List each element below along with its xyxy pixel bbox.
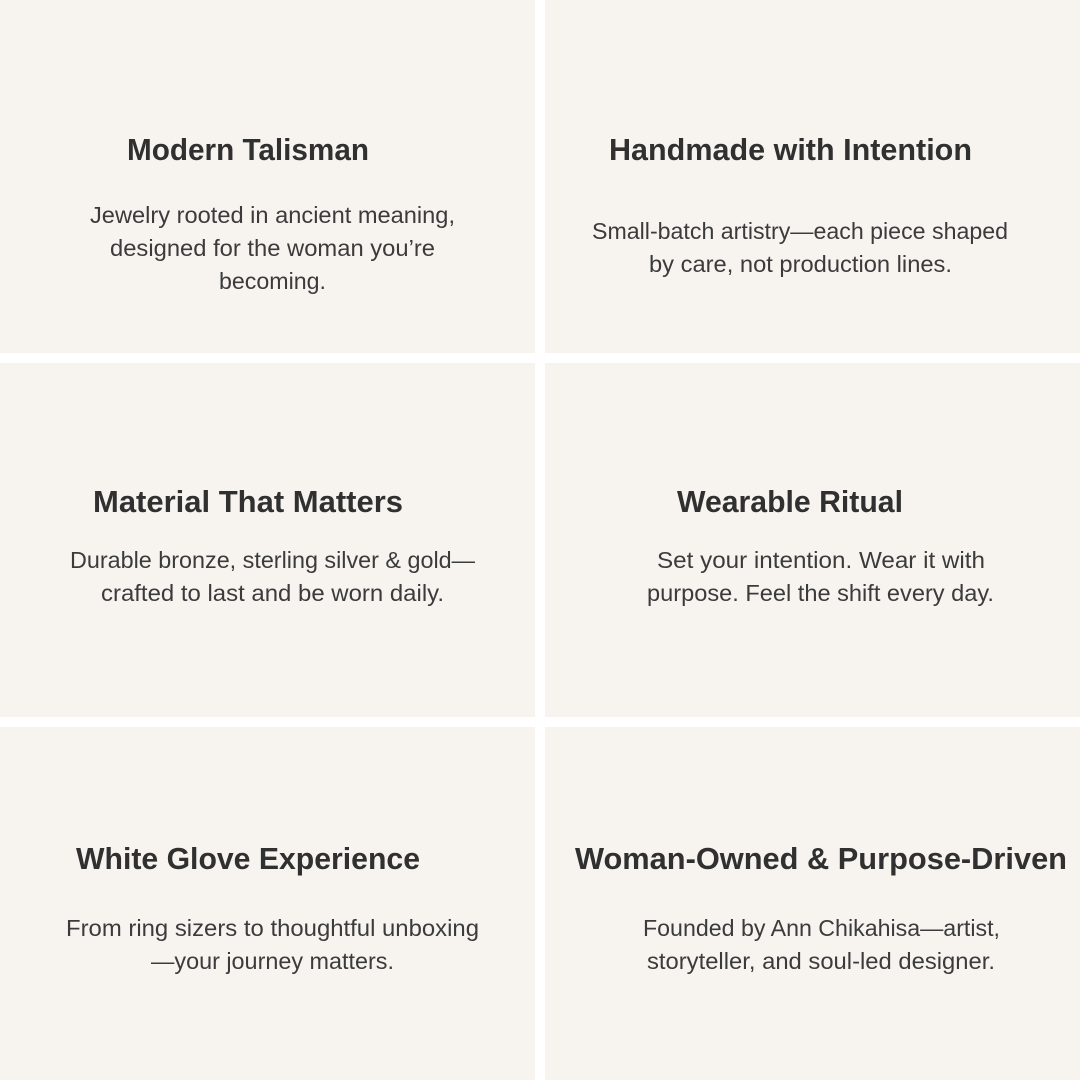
panel: Wearable Ritual (545, 363, 1080, 717)
text block: Handmade with Intention description: by care, not production lines. (649, 251, 952, 277)
text block: Modern Talisman description: becoming. (219, 268, 326, 294)
text block: Wearable Ritual description: Set your intention. Wear it with (657, 547, 985, 573)
text block: Modern Talisman description: Jewelry rooted in ancient meaning, (90, 202, 455, 228)
heading: Handmade with Intention: Handmade with Intention (609, 132, 972, 167)
text block: White Glove Experience description (66, 915, 479, 974)
text block: Modern Talisman description: designed for the woman you’re (110, 235, 435, 261)
text block: White Glove Experience description: —your journey matters. (151, 948, 394, 974)
heading: Wearable Ritual: Wearable Ritual (677, 484, 903, 519)
text block: Wearable Ritual description (647, 547, 994, 606)
text block: Material That Matters description: Durable bronze, sterling silver & gold— (70, 547, 475, 573)
text block: Wearable Ritual description: purpose. Feel the shift every day. (647, 580, 994, 606)
panel: Woman-Owned & Purpose-Driven (545, 727, 1080, 1080)
text block: Handmade with Intention description (592, 218, 1008, 277)
panel: White Glove Experience (0, 727, 535, 1080)
text block: Woman-Owned & Purpose-Driven description: storyteller, and soul-led designer. (647, 948, 995, 974)
heading: Woman-Owned & Purpose-Driven: Woman-Owned & Purpose-Driven (575, 841, 1067, 876)
text block: Modern Talisman description (90, 202, 455, 294)
heading: White Glove Experience: White Glove Experience (76, 841, 420, 876)
text block: Material That Matters description: crafted to last and be worn daily. (101, 580, 444, 606)
heading: Material That Matters: Material That Matters (93, 484, 403, 519)
text block: Woman-Owned & Purpose-Driven description (643, 915, 1000, 974)
text block: Woman-Owned & Purpose-Driven description: Founded by Ann Chikahisa—artist, (643, 915, 1000, 941)
text block: Handmade with Intention description: Small-batch artistry—each piece shaped (592, 218, 1008, 244)
panel: Handmade with Intention (545, 0, 1080, 353)
text block: Material That Matters description (70, 547, 475, 606)
text block: White Glove Experience description: From ring sizers to thoughtful unboxing (66, 915, 479, 941)
panel: Modern Talisman (0, 0, 535, 353)
heading: Modern Talisman: Modern Talisman (127, 132, 369, 167)
panel: Material That Matters (0, 363, 535, 717)
